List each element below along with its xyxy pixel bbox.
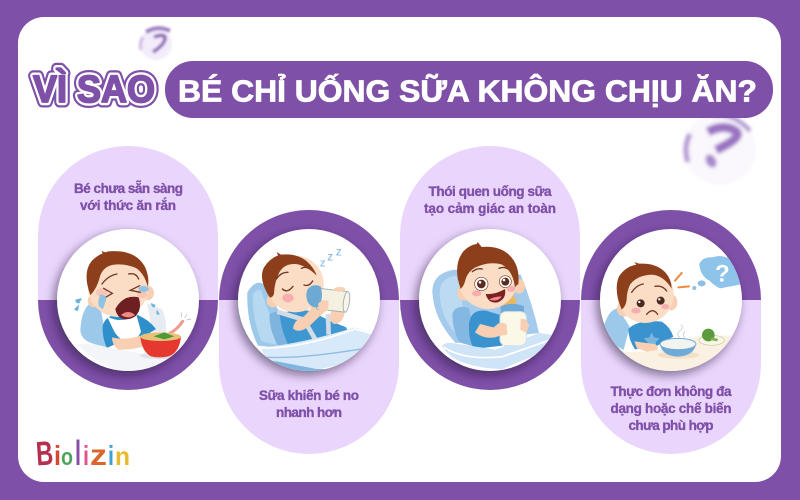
heading: VÌ SAO: VÌ SAO (33, 67, 155, 111)
illustration: sad baby thinking at the table (604, 256, 743, 371)
label: reason 3: tạo cảm giác an toàn (424, 201, 556, 216)
label: reason 3: Thói quen uống sữa (428, 184, 552, 199)
logo: Biolizin: l (75, 434, 81, 473)
panel: reason 4 (581, 210, 761, 454)
illustration: sleeping baby with bottle: Z (320, 258, 326, 268)
heading pill (165, 61, 773, 118)
logo: Biolizin: o (61, 444, 73, 471)
illustration: crying baby with bowl (74, 251, 197, 373)
logo: Biolizin: z (90, 439, 107, 472)
label: reason 1: với thức ăn rắn (80, 198, 176, 213)
logo: Biolizin: n (115, 441, 130, 471)
logo: Biolizin: i (83, 440, 89, 471)
label: reason 4: Thực đơn không đa (610, 384, 732, 399)
label: reason 2: Sữa khiến bé no (259, 388, 359, 403)
panel: reason 1 (38, 146, 218, 390)
logo: Biolizin: i (54, 440, 61, 471)
illustration: sad baby thinking at the table: ? (715, 260, 730, 287)
label: reason 1: Bé chưa sẵn sàng (74, 181, 183, 196)
label: reason 2: nhanh hơn (276, 405, 342, 420)
icon: small question bubble (140, 28, 172, 60)
label: reason 4: chưa phù hợp (628, 418, 714, 433)
heading pill: BÉ CHỈ UỐNG SỮA KHÔNG CHỊU ĂN? (178, 72, 757, 108)
illustration: sleeping baby with bottle (247, 247, 380, 372)
logo: Biolizin: B (35, 434, 54, 474)
illustration: sleeping baby with bottle: Z (327, 252, 333, 262)
panel: reason 2 (219, 210, 399, 454)
heading: VÌ SAO: VÌ SAO (33, 67, 155, 111)
heading: VÌ SAO: VÌ SAO (33, 67, 155, 111)
logo: Biolizin: i (108, 440, 114, 471)
label: reason 4: dạng hoặc chế biến (610, 401, 732, 416)
logo: Biolizin (35, 434, 130, 474)
icon: large question bubble (684, 113, 756, 185)
panel: reason 3 (400, 146, 580, 390)
illustration: sleeping baby with bottle: Z (336, 247, 342, 257)
illustration: happy baby holding bottle (432, 242, 553, 369)
